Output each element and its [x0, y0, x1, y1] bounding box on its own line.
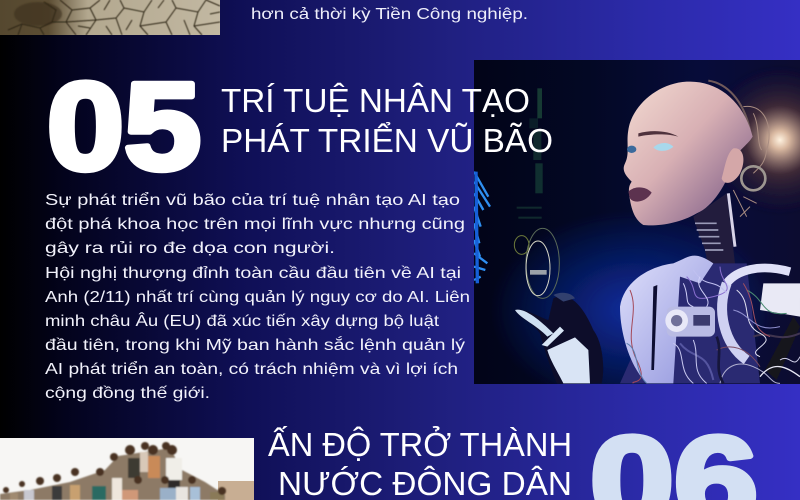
- wires: [627, 267, 800, 383]
- heading: section 06: [268, 426, 572, 500]
- hologram: blue globe fragment: [474, 172, 490, 283]
- heading: section 05: TRÍ TUỆ NHÂN TẠO: [221, 82, 530, 119]
- body text: section 05: đầu tiên, trong khi Mỹ ban hành sắc lệnh quản lý: [45, 335, 465, 354]
- body text: section 05: minh châu Âu (EU) đã xúc tiến xây dựng bộ luật: [45, 311, 440, 330]
- left shoulder shell: [620, 256, 713, 383]
- body text: section 05: Hội nghị thượng đỉnh toàn cầu đầu tiên về AI tại: [45, 265, 461, 282]
- body text: section 05: đột phá khoa học trên mọi lĩnh vực nhưng cũng: [45, 216, 465, 233]
- heading: section 05: PHÁT TRIỂN VŨ BÃO: [221, 122, 553, 159]
- body text: section 05: gây ra rủi ro đe dọa con người.: [45, 240, 335, 257]
- heading: section 06: ẤN ĐỘ TRỞ THÀNH: [268, 426, 572, 463]
- eye left: [627, 146, 636, 153]
- hologram: circular dial: [514, 228, 559, 298]
- blue ambient glow: [498, 218, 766, 384]
- robot torso wires: [620, 263, 760, 383]
- body text: section 05: Sự phát triển vũ bão của trí tuệ nhân tạo AI tạo: [45, 191, 460, 209]
- big number 05: 05: [47, 58, 201, 196]
- body text: section 05: [45, 191, 470, 402]
- eyebrow: [638, 131, 678, 137]
- heading: section 05: [221, 82, 553, 159]
- photo: humanoid robot with holographic display: [474, 60, 800, 410]
- body text: section 05: Anh (2/11) nhất trí cùng quản lý nguy cơ do AI. Liên: [45, 289, 470, 306]
- warm light behind head: [703, 63, 800, 217]
- lips: [628, 187, 652, 202]
- robot head and face: [624, 82, 753, 225]
- eye right: [653, 143, 673, 151]
- chest motor: [665, 307, 715, 337]
- body text: section 05: AI phát triển an toàn, có trách nhiệm và vì lợi ích: [45, 360, 458, 378]
- right shoulder ring: [722, 268, 800, 380]
- exposed head circuitry: [708, 81, 769, 217]
- photo: cracked dry earth: [0, 0, 220, 35]
- hologram: green data columns: [517, 88, 543, 219]
- body text: section 05: cộng đồng thế giới.: [45, 385, 210, 402]
- text: end of previous section: hơn cả thời kỳ Tiền Công nghiệp.: [251, 6, 528, 23]
- photo: crowd of people on a wall: [0, 438, 254, 500]
- ear: [722, 148, 743, 183]
- robot hand: [515, 293, 603, 383]
- robot neck: [694, 193, 736, 264]
